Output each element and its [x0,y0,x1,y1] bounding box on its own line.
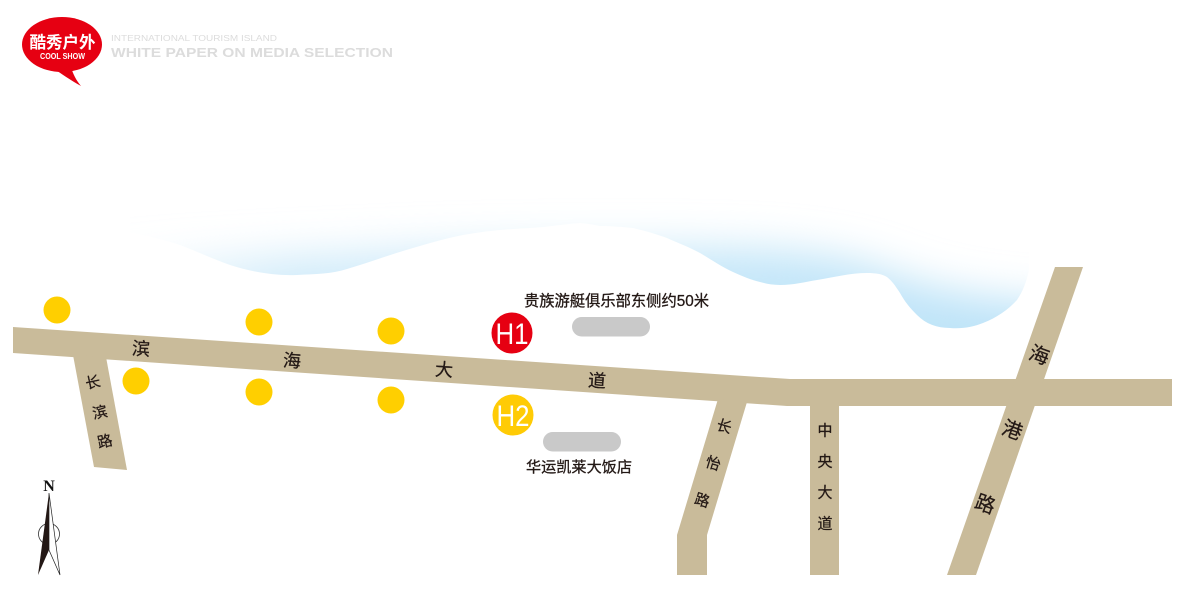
header tagline [111,34,393,60]
logo subtitle: COOL SHOW [40,51,86,61]
label: 滨海大道 [131,338,607,392]
placeholder pill H2 [543,432,621,452]
placeholder pill H1 [572,317,650,336]
label: 海港路: 港 [999,416,1026,445]
road: 长滨路 [73,355,127,470]
label: 中央大道 [817,422,833,532]
yellow location dots [44,296,404,414]
tagline small: INTERNATIONAL TOURISM ISLAND [111,34,277,43]
label: 海港路: 路 [972,490,999,519]
marker H1: H1 [496,318,528,351]
label: 滨海大道: 道 [587,370,607,392]
label: 长怡路: 怡 [703,454,723,474]
road: 长怡路 [677,399,747,575]
road: 海港路 [947,267,1083,575]
roads [13,267,1172,575]
label: 滨海大道: 滨 [131,338,151,360]
label: 中央大道: 大 [817,484,833,502]
label: 长怡路: 路 [692,491,712,511]
label: 中央大道: 道 [817,516,833,532]
label: 中央大道: 央 [817,454,833,470]
logo name: 酷秀户外 [30,32,96,52]
label: 长滨路: 滨 [91,403,109,423]
road: 中央大道 [810,404,839,575]
compass [38,478,60,575]
road: 滨海大道 [13,327,1172,406]
label: 长怡路: 长 [714,417,734,437]
logo: speech bubble [22,17,102,86]
label: 长滨路 [84,373,114,452]
label: 长滨路: 长 [84,373,102,393]
label: 滨海大道: 大 [434,359,454,381]
callout: H2 location: 华运凯莱大饭店 [526,459,632,476]
callout: H1 location: 贵族游艇俱乐部东侧约50米 [524,292,709,310]
road labels [84,338,1053,532]
compass letter: N [43,478,55,495]
label: 海港路 [972,341,1053,519]
label: 长滨路: 路 [96,432,114,452]
water body [192,226,1026,328]
tagline large: WHITE PAPER ON MEDIA SELECTION [111,46,393,60]
label: 中央大道: 中 [817,422,833,440]
label: 滨海大道: 海 [282,350,302,372]
label: 海港路: 海 [1026,341,1053,370]
marker H2: H2 [496,400,530,433]
label: 长怡路 [692,417,734,511]
